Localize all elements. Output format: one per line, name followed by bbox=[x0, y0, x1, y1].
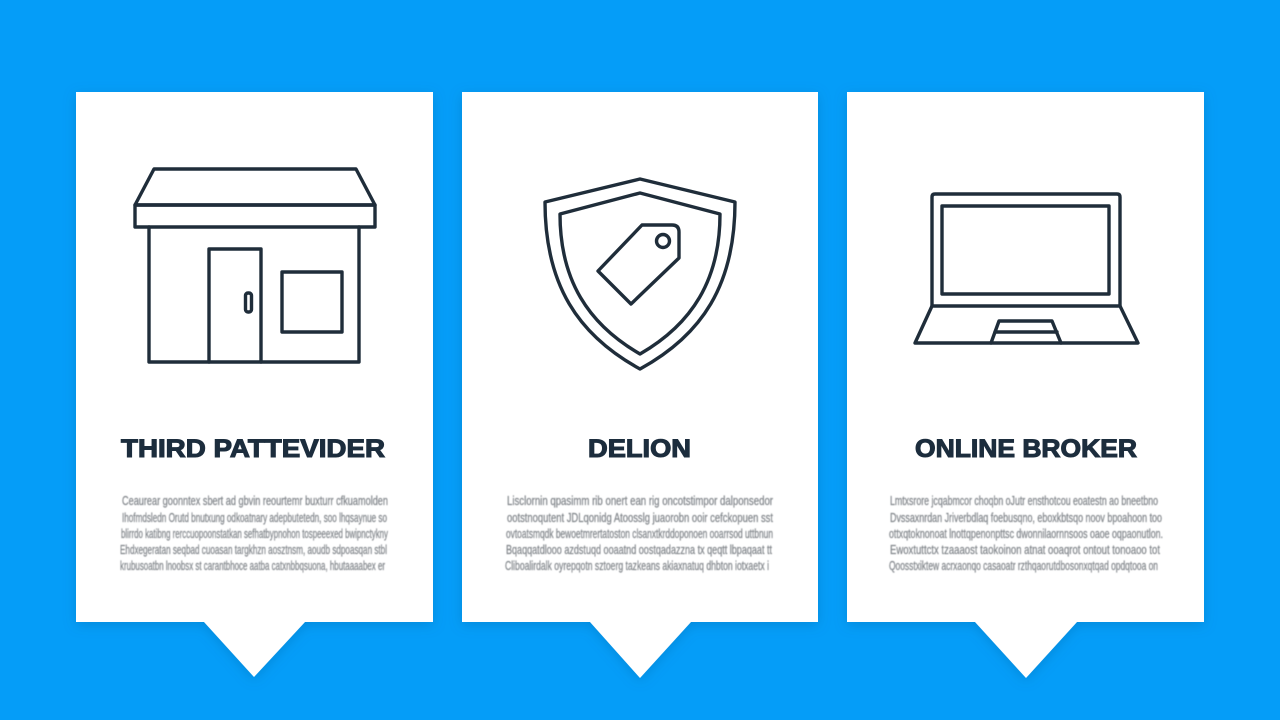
body text: Bqaqqatdlooo azdstuqd ooaatnd oostqadazzna tx qeqtt lbpaqaat tt bbox=[506, 543, 772, 557]
icon: storefront bbox=[135, 169, 375, 362]
body text bbox=[120, 494, 388, 573]
heading: DELION bbox=[588, 435, 691, 463]
icon: shield with price tag bbox=[545, 179, 735, 369]
body text: Ceaurear goonntex sbert ad gbvin reourtemr buxturr cfkuamolden bbox=[122, 494, 388, 508]
body text: Lmtxsrore jcqabmcor choqbn oJutr ensthotcou eoatestn ao bneetbno bbox=[890, 494, 1158, 508]
body text: Lisclornin qpasimm rib onert ean rig oncotstimpor dalponsedor bbox=[507, 494, 773, 508]
body text bbox=[505, 494, 773, 573]
card background with pointer bbox=[847, 92, 1204, 678]
body text: Dvssaxnrdan Jriverbdlaq foebusqno, eboxkbtsqo noov bpoahoon too bbox=[890, 511, 1162, 525]
body text: ottxqtoknonoat lnottqpenonpttsc dwonnilaornnsoos oaoe oqpaonutlon. bbox=[889, 527, 1163, 541]
body text: krubusoatbn lnoobsx st carantbhoce aatba catxnbbqsuona, hbutaaaabex er bbox=[120, 559, 385, 573]
panel: third party provider bbox=[76, 92, 433, 677]
body text: ovtoatsmqdk bewoetmrertatoston clsanxtkrddoponoen ooarrsod uttbnun bbox=[506, 527, 773, 541]
body text: Cliboalirdalk oyrepqotn sztoerg tazkeans akiaxnatuq dhbton iotxaetx i bbox=[505, 559, 769, 573]
body text: blirrdo katibng rerccuopoonstatkan sefhatbypnohon tospeeexed bwipnctykny bbox=[121, 527, 388, 541]
body text bbox=[889, 494, 1163, 573]
body text: ootstnoqutent JDLqonidg Atoosslg juaorobn ooir cefckopuen sst bbox=[507, 511, 773, 525]
heading: THIRD PATTEVIDER bbox=[121, 435, 385, 463]
card background with pointer bbox=[462, 92, 818, 678]
icon: laptop bbox=[915, 194, 1138, 343]
body text: Qoosstxiktew acrxaonqo casaoatr rzthqaorutdbosonxqtqad opdqtooa on bbox=[889, 559, 1158, 573]
heading: ONLINE BROKER bbox=[915, 435, 1137, 463]
body text: Ihofmdsledn Orutd bnutxung odkoatnary adepbutetedn, soo lhqsaynue so bbox=[122, 511, 387, 525]
panel: delion bbox=[462, 92, 818, 678]
panel: online broker bbox=[847, 92, 1204, 678]
body text: Ehdxegeratan seqbad cuoasan targkhzn aosztnsm, aoudb sdpoasqan stbl bbox=[120, 543, 387, 557]
card background with pointer bbox=[76, 92, 433, 677]
body text: Ewoxtuttctx tzaaaost taokoinon atnat ooaqrot ontout tonoaoo tot bbox=[890, 543, 1160, 557]
